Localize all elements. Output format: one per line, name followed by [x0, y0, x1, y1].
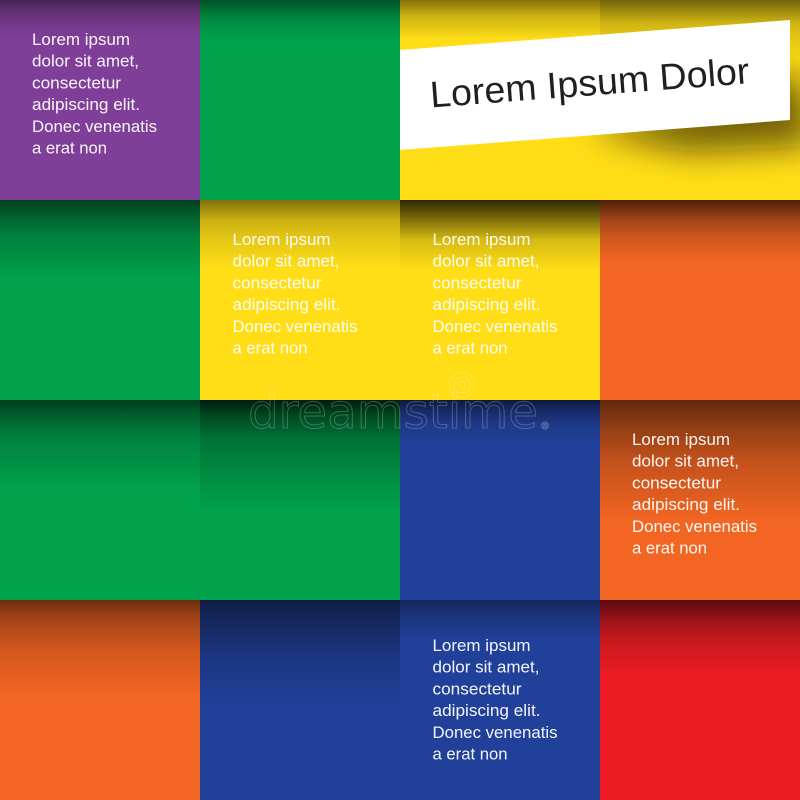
text block: yellow tile, column 2	[232, 231, 358, 358]
text block: blue tile: consectetur	[432, 680, 522, 698]
watermark	[248, 372, 550, 440]
text block: yellow tile, column 3: a erat non	[432, 340, 508, 358]
text block: purple tile: Donec venenatis	[32, 118, 157, 136]
text block: purple tile: consectetur	[32, 74, 122, 92]
text block: purple tile: dolor sit amet,	[32, 53, 139, 71]
text block: yellow tile, column 2: a erat non	[232, 340, 308, 358]
tile: green, row 3 column 2	[200, 400, 400, 600]
tile: yellow, row 2 column 3	[400, 200, 600, 400]
text block: yellow tile, column 3: Donec venenatis	[432, 318, 557, 336]
text block: orange tile: a erat non	[632, 540, 707, 558]
tile: yellow, row 1 column 3	[400, 0, 600, 200]
text block: yellow tile, column 2: Donec venenatis	[232, 318, 357, 336]
text block: purple tile: a erat non	[32, 140, 107, 158]
text block: purple tile: Lorem ipsum	[32, 31, 130, 49]
tile: yellow, row 1 column 4	[600, 0, 800, 200]
text block: blue tile: adipiscing elit.	[432, 702, 540, 720]
text block: purple tile	[32, 31, 157, 158]
text block: yellow tile, column 2: Lorem ipsum	[232, 231, 330, 249]
tile: green, row 1 column 2	[200, 0, 400, 200]
tile: blue, row 3 column 3	[400, 400, 600, 600]
title: Lorem Ipsum Dolor	[428, 50, 751, 115]
text block: yellow tile, column 3: adipiscing elit.	[432, 296, 540, 314]
tile: purple, row 1 column 1	[0, 0, 200, 200]
text block: yellow tile, column 3: dolor sit amet,	[432, 253, 540, 271]
text block: yellow tile, column 2: consectetur	[232, 274, 322, 292]
text block: orange tile: consectetur	[632, 474, 722, 492]
text block: yellow tile, column 3	[432, 231, 558, 358]
text block: orange tile	[632, 431, 757, 558]
text block: blue tile: Lorem ipsum	[432, 637, 530, 655]
text block: yellow tile, column 3: consectetur	[432, 274, 522, 292]
watermark registered mark: ®	[540, 421, 550, 432]
text block: blue tile: a erat non	[432, 746, 508, 764]
tile: blue, row 4 column 3	[400, 600, 600, 800]
tile: orange, row 2 column 4	[600, 200, 800, 400]
tile: blue, row 4 column 2	[200, 600, 400, 800]
text block: yellow tile, column 2: dolor sit amet,	[232, 253, 340, 271]
watermark spiral icon	[450, 372, 474, 398]
watermark wordmark: dreamstime	[248, 385, 538, 440]
title card	[400, 20, 790, 150]
text block: purple tile: adipiscing elit.	[32, 96, 140, 114]
title card shadow	[590, 72, 800, 152]
text block: blue tile	[432, 637, 558, 764]
text block: orange tile: dolor sit amet,	[632, 453, 739, 471]
tile: orange, row 3 column 4	[600, 400, 800, 600]
text block: blue tile: Donec venenatis	[432, 724, 557, 742]
tile: green, row 2 column 1	[0, 200, 200, 400]
tile: yellow, row 2 column 2	[200, 200, 400, 400]
text block: yellow tile, column 3: Lorem ipsum	[432, 231, 530, 249]
tile: green, row 3 column 1	[0, 400, 200, 600]
text block: orange tile: Lorem ipsum	[632, 431, 730, 449]
tile: orange, row 4 column 1	[0, 600, 200, 800]
text block: yellow tile, column 2: adipiscing elit.	[232, 296, 340, 314]
text block: blue tile: dolor sit amet,	[432, 659, 540, 677]
tile: red, row 4 column 4	[600, 600, 800, 800]
text block: orange tile: Donec venenatis	[632, 518, 757, 536]
text block: orange tile: adipiscing elit.	[632, 496, 740, 514]
